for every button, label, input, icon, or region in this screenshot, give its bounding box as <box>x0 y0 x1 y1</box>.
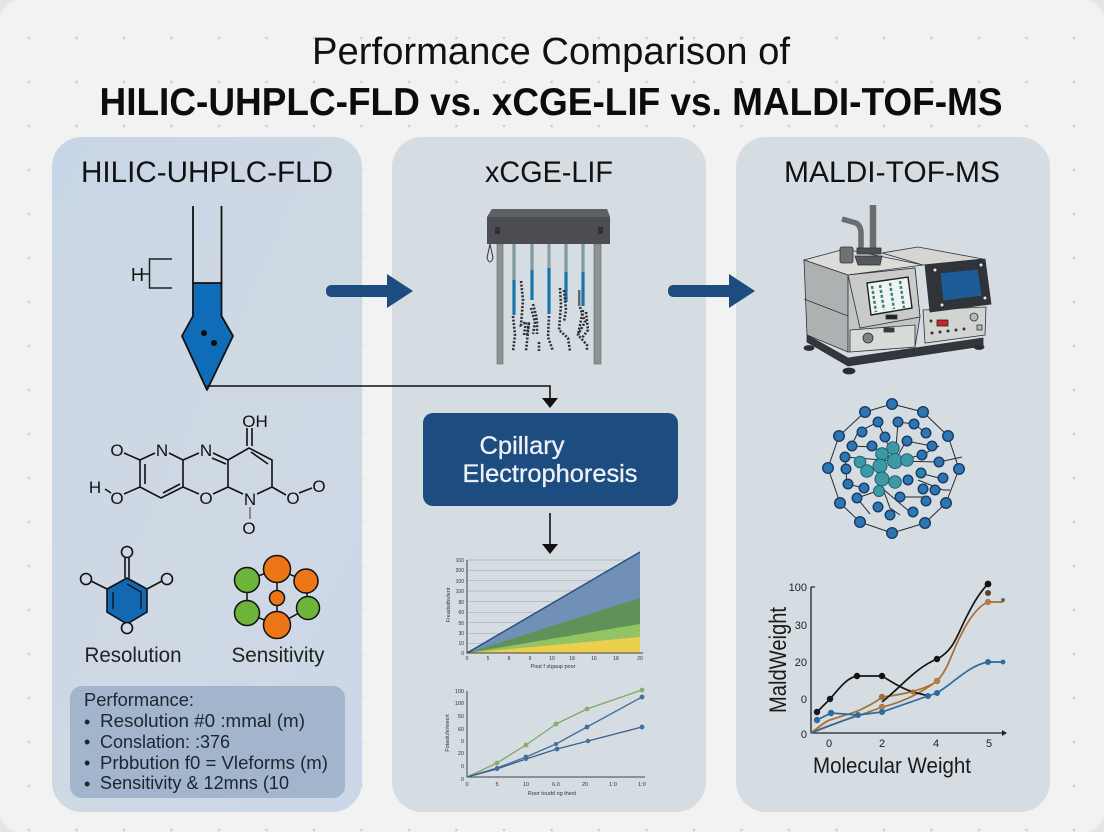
icon: molecular structure: O <box>110 489 124 508</box>
icon: molecular structure: O <box>242 519 256 538</box>
performance box: • <box>84 753 90 773</box>
line chart: 5 <box>495 782 499 788</box>
connector: column to capillary electrophoresis <box>207 386 558 408</box>
icon: sensitivity <box>234 556 320 638</box>
area chart: 100 <box>456 579 464 585</box>
arrow: HILIC to xCGE <box>326 274 413 308</box>
area chart: 18 <box>569 656 575 662</box>
performance box: • <box>84 732 90 752</box>
area chart: 9 <box>529 656 532 662</box>
performance box <box>70 686 345 798</box>
performance box: Resolution #0 :mmal (m) <box>100 711 305 731</box>
title: HILIC-UHPLC-FLD vs. xCGE-LIF vs. MALDI-TOF-MS <box>100 81 1002 124</box>
area chart <box>446 552 643 670</box>
area chart: 30 <box>458 631 464 637</box>
area chart: 16 <box>591 656 597 662</box>
line chart: 0 <box>461 739 464 745</box>
icon: molecular structure: O <box>199 489 213 508</box>
label: Resolution: Resolution <box>84 644 182 667</box>
area chart: 200 <box>456 568 464 574</box>
area chart: 20 <box>637 656 643 662</box>
icon: HPLC column: H <box>131 265 144 285</box>
area chart: 100 <box>456 558 464 564</box>
area chart: 8 <box>508 656 511 662</box>
icon: resolution <box>80 546 172 634</box>
heading: MALDI-TOF-MS: MALDI-TOF-MS <box>784 156 1000 189</box>
line chart: 20 <box>458 751 464 757</box>
area chart: 0 <box>461 651 464 657</box>
line chart: 100 <box>455 689 464 695</box>
performance box: Conslation: :376 <box>100 732 230 752</box>
area chart: 100 <box>456 589 464 595</box>
icon: molecular structure: O <box>286 489 300 508</box>
line chart: 20 <box>582 782 588 788</box>
icon: capillary array <box>487 209 610 364</box>
molecular weight chart: MaldWeight <box>765 607 792 713</box>
arrow: xCGE to MALDI <box>668 274 755 308</box>
molecular weight chart: 5 <box>986 738 992 750</box>
area chart: 18 <box>613 656 619 662</box>
molecular weight chart: Molecular Weight <box>813 753 971 778</box>
title: Performance Comparison of <box>312 31 790 73</box>
molecular weight chart: 20 <box>795 657 807 669</box>
title <box>100 31 1002 124</box>
molecular weight chart: 0 <box>826 738 832 750</box>
molecular weight chart <box>765 581 1007 778</box>
performance box: • <box>84 712 90 732</box>
line chart: 0 <box>465 782 469 788</box>
icon: mass spectrometer <box>804 205 991 374</box>
line chart: 100 <box>455 701 464 707</box>
molecular weight chart: 2 <box>879 738 885 750</box>
icon: molecular structure: OH <box>242 412 268 431</box>
arrow: down to chart <box>542 513 558 554</box>
area chart: Pout f stgaup poor <box>531 664 576 670</box>
heading: HILIC-UHPLC-FLD: HILIC-UHPLC-FLD <box>81 156 333 189</box>
icon: HPLC column <box>131 206 233 390</box>
line chart: Fotaslufe/weert <box>445 714 451 752</box>
icon: molecular structure: N <box>156 441 168 460</box>
area chart: 10 <box>549 656 555 662</box>
callout: capillary electrophoresis: Electrophoresis <box>462 460 638 488</box>
line chart: 60 <box>458 727 464 733</box>
area chart: 0 <box>466 656 469 662</box>
performance box: Performance: <box>84 690 194 710</box>
molecular weight chart: 0 <box>801 694 807 706</box>
line chart: Roor toudd ng thest <box>528 791 577 797</box>
area chart: 60 <box>458 610 464 616</box>
line chart: 6.0 <box>552 782 560 788</box>
label: Sensitivity: Sensitivity <box>232 644 325 667</box>
performance box: Prbbution f0 = Vleforms (m) <box>100 753 328 773</box>
heading: xCGE-LIF: xCGE-LIF <box>485 156 613 189</box>
molecular weight chart: 4 <box>933 738 939 750</box>
icon: molecular structure: H <box>89 478 101 497</box>
line chart: 1:0 <box>638 782 646 788</box>
area chart: Freadwibufent <box>446 587 452 622</box>
line chart: 0 <box>461 777 464 783</box>
panel: MALDI-TOF-MS <box>736 137 1050 812</box>
callout: capillary electrophoresis <box>423 413 678 506</box>
area chart: 50 <box>458 621 464 627</box>
icon: molecular structure: O <box>110 441 124 460</box>
icon: molecular structure: N <box>244 490 256 509</box>
icon: molecular structure: N <box>200 441 212 460</box>
icon: molecular network <box>823 399 964 538</box>
molecular weight chart: 0 <box>801 729 807 741</box>
line chart: 1:0 <box>609 782 617 788</box>
line chart: 50 <box>458 714 464 720</box>
callout: capillary electrophoresis: Cpillary <box>480 432 565 460</box>
icon: molecular structure <box>89 412 326 538</box>
area chart: 5 <box>487 656 490 662</box>
area chart: 80 <box>458 600 464 606</box>
performance box: Sensitivity & 12mns (10 <box>100 773 289 793</box>
performance box: • <box>84 774 90 794</box>
panel: xCGE-LIF <box>392 137 706 812</box>
molecular weight chart: 100 <box>789 582 807 594</box>
line chart: 0 <box>461 764 464 770</box>
panel: HILIC-UHPLC-FLD <box>52 137 362 812</box>
area chart: 10 <box>458 641 464 647</box>
molecular weight chart: 30 <box>795 620 807 632</box>
line chart <box>445 688 646 797</box>
line chart: 10 <box>523 782 529 788</box>
icon: molecular structure: O <box>312 477 326 496</box>
